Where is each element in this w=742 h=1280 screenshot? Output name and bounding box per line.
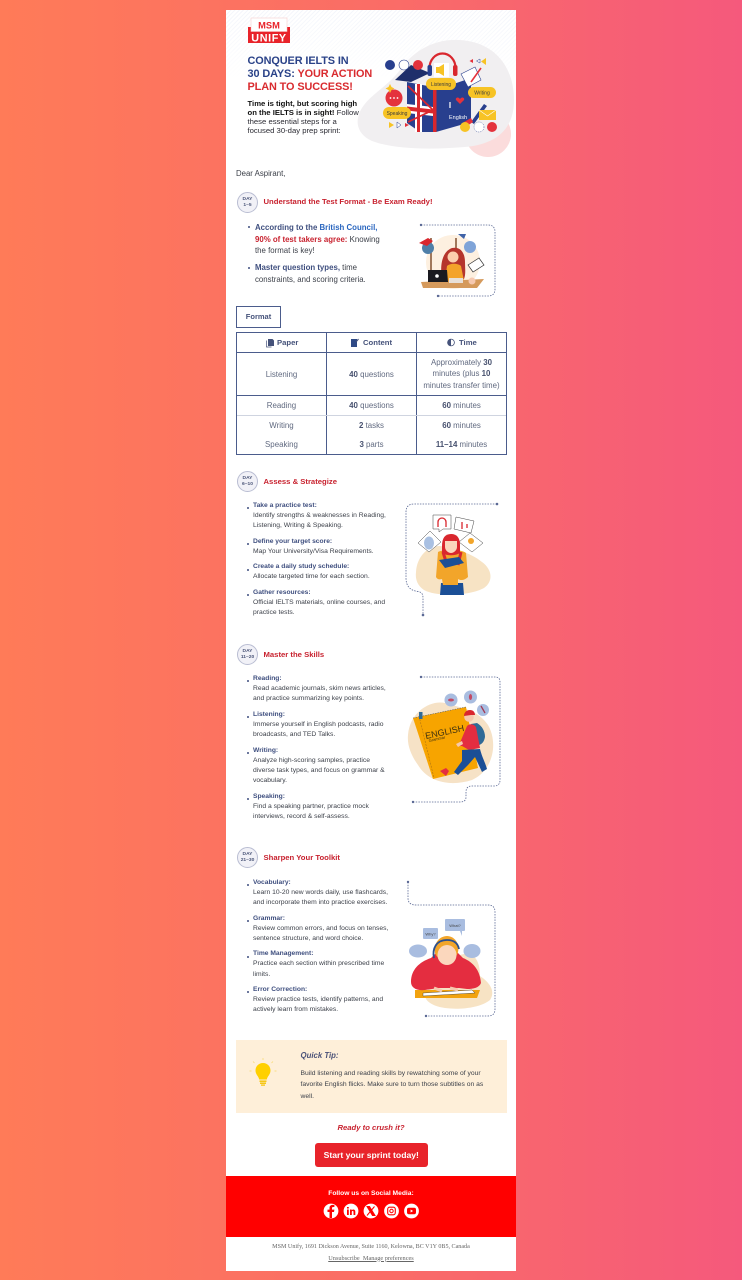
quick tip text: Build listening and reading skills by rewatching some of your [300,1070,481,1076]
call to action text: Ready to crush it? [337,1123,405,1132]
intro text: Time is tight, but scoring high [248,98,357,108]
panel: quick tip [236,1040,507,1113]
greeting: Dear Aspirant, [236,169,285,178]
heading: master the skills: Master the Skills [264,650,324,658]
list: sharpen your toolkit: Review common errors, and focus on tenses, [253,924,388,932]
title: CONQUER IELTS IN [248,55,349,67]
row: speaking: Speaking [265,440,298,449]
list: master the skills: broadcasts, and TED Talks. [253,730,335,738]
icon: MSM Unify logo: UNIFY [251,32,287,44]
quick tip text: well. [300,1093,314,1100]
hero illustration: IELTS books and bubbles: I [449,101,451,110]
illustration: student carrying English book with dashed frame: Grammar [428,734,446,743]
list: assess and strategize: Define your target score: [253,538,332,544]
icon: table paper [266,339,274,347]
icon: table content [351,339,358,347]
table: IELTS format: 40 questions [349,370,394,378]
heading: understand the test format: Understand the Test Format - Be Exam Ready! [264,197,433,206]
quick tip heading: Quick Tip: [300,1051,338,1060]
list: master the skills: Listening: [253,710,285,718]
badge: day 6-10 [237,471,258,492]
list: assess and strategize: Allocate targeted time for each section. [253,573,370,580]
intro text: on the IELTS is in sight! Follow [248,108,359,116]
list: sharpen your toolkit [247,878,388,1013]
badge: day 1-5: DAY [243,197,252,202]
illustration: student carrying English book with dashed frame: ENGLISH [424,723,465,741]
badge: day 1-5 [237,192,258,213]
footer: links: Unsubscribe Manage preferences [328,1254,414,1262]
row: reading: Reading [267,400,296,410]
icon: table time [447,339,455,346]
badge: day 11-20 [237,644,258,665]
list: master the skills [247,674,386,820]
illustration: student writing with headphones and dashed frame [407,881,495,1017]
list: master the skills: Writing: [253,746,278,754]
badge: day 21-30 [237,847,258,868]
list: assess and strategize: practice tests. [253,609,295,616]
list: master the skills: Speaking: [253,792,285,800]
list: sharpen your toolkit: sentence structure, and word choice. [253,934,363,942]
footer: address: MSM Unify, 1691 Dickson Avenue, Suite 1160, Kelowna, BC V1Y 0B5, Canada [272,1244,470,1250]
badge: day 21-30: DAY [243,852,252,857]
list: assess and strategize: Listening, Writing & Speaking. [253,522,343,529]
button: format tab [236,306,281,328]
list: sharpen your toolkit: actively learn from mistakes. [253,1006,338,1013]
bullets: test format: 90% of test takers agree: Knowing [255,234,380,244]
title [248,55,372,93]
intro text: focused 30-day prep sprint: [248,126,341,134]
quick tip text: favorite English flicks. Make sure to turn those subtitles on as [300,1081,483,1088]
list: sharpen your toolkit: Learn 10-20 new words daily, use flashcards, [253,888,388,896]
list: sharpen your toolkit: Vocabulary: [253,878,291,886]
bullets: test format: constraints, and scoring criteria. [255,274,366,284]
list: assess and strategize: Create a daily study schedule: [253,563,349,570]
badge: day 11-20: DAY [243,649,252,654]
list: master the skills: vocabulary. [253,776,287,784]
badge: day 6-10: DAY [243,476,252,481]
table: IELTS format: Content [363,338,392,347]
list: master the skills: Analyze high-scoring samples, practice [253,756,370,764]
table: IELTS format: 40 questions [349,400,394,410]
list: assess and strategize: Official IELTS materials, online courses, and [253,599,385,606]
button: start your sprint: Start your sprint today! [324,1150,419,1160]
list: master the skills: diverse task types, and focus on grammar & [253,766,385,774]
table: IELTS format: Time [459,338,477,347]
list: sharpen your toolkit: and incorporate them into practice exercises. [253,899,387,906]
title: PLAN TO SUCCESS! [248,81,353,93]
table: IELTS format: 60 minutes [442,400,481,410]
bullets: test format [248,223,380,284]
bullets: test format: According to the British Council, [255,223,377,232]
illustration: student reading with dashed frame [406,503,498,616]
heading: assess and strategize: Assess & Strategize [264,476,337,486]
button: start your sprint [314,1143,428,1167]
icon: MSM Unify logo: MSM [258,20,280,30]
list: sharpen your toolkit: Time Management: [253,950,313,957]
button: format tab: Format [246,312,271,321]
table: IELTS format: minutes (plus 10 [433,369,490,378]
list: sharpen your toolkit: Practice each section within prescribed time [253,960,384,967]
title: 30 DAYS: YOUR ACTION [248,68,372,80]
social heading: Follow us on Social Media: [328,1190,414,1197]
table: IELTS format: 3 parts [359,440,384,449]
list: assess and strategize: Identify strengths & weaknesses in Reading, [253,512,386,519]
row: writing: Writing [269,420,294,430]
row: listening: Listening [266,370,297,378]
table: IELTS format: 11–14 minutes [436,440,487,449]
white email card [226,10,516,1271]
social icons [324,1204,419,1218]
table: IELTS format: minutes transfer time) [423,381,500,390]
illustration: student writing with headphones and dashed frame: Why? [425,932,436,936]
intro text: these essential steps for a [248,116,337,126]
list: assess and strategize: Gather resources: [253,588,311,596]
list: assess and strategize: Map Your University/Visa Requirements. [253,548,374,554]
hero illustration: IELTS books and bubbles: Speaking [387,111,408,117]
list: assess and strategize [247,502,386,616]
hero illustration: IELTS books and bubbles [358,40,514,157]
list: sharpen your toolkit: Error Correction: [253,986,307,992]
icon: light bulb [250,1058,276,1086]
list: master the skills: and practice summarizing key points. [253,695,364,702]
badge: day 1-5: 1–5 [243,203,252,208]
table header: Paper [277,338,298,347]
list: assess and strategize: Take a practice test: [253,502,317,508]
list: sharpen your toolkit: limits. [253,970,270,978]
illustration: student at laptop with dashed frame [419,224,495,297]
hero illustration: IELTS books and bubbles: English [449,115,467,121]
list: sharpen your toolkit: Review practice tests, identify patterns, and [253,996,383,1003]
list: master the skills: Read academic journals, skim news articles, [253,685,386,692]
list: master the skills: Find a speaking partner, practice mock [253,802,369,810]
hero illustration: IELTS books and bubbles: Listening [431,82,451,88]
table: IELTS format [236,332,507,455]
list: master the skills: Reading: [253,674,282,682]
illustration: student writing with headphones and dashed frame: What? [449,923,462,928]
footer: social band [226,1176,516,1237]
bullets: test format: Master question types, time [255,263,357,272]
list: master the skills: Immerse yourself in English podcasts, radio [253,720,384,728]
list: master the skills: interviews, record & self-assess. [253,812,350,820]
quick tip text [300,1070,483,1100]
badge: day 21-30: 21–30 [241,858,254,863]
table: IELTS format: Approximately 30 [431,358,492,366]
list: sharpen your toolkit: Grammar: [253,914,285,922]
hero illustration: IELTS books and bubbles: Writing [474,90,490,96]
illustration: student carrying English book with dashed frame [408,676,500,803]
bullets: test format: the format is key! [255,246,315,255]
table: IELTS format: 2 tasks [359,420,384,430]
icon: MSM Unify logo [248,18,290,44]
badge: day 6-10: 6–10 [242,482,253,487]
intro text [248,98,359,134]
heading: sharpen your toolkit: Sharpen Your Toolkit [264,853,340,862]
table: IELTS format: 60 minutes [442,420,481,430]
badge: day 11-20: 11–20 [241,655,254,660]
